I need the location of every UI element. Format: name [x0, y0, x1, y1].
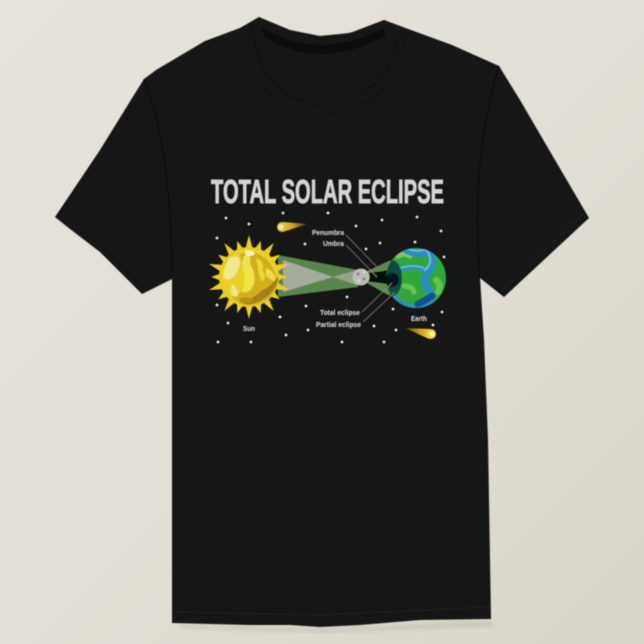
sun corona ring	[219, 247, 279, 307]
back neck tape	[262, 28, 385, 54]
label: Sun: Sun	[243, 326, 255, 333]
shirt body and sleeves	[55, 17, 589, 627]
collar band	[242, 24, 406, 115]
label lines	[346, 235, 395, 322]
label: Penumbra: Penumbra	[312, 230, 344, 237]
comet bottom	[405, 328, 436, 339]
moon	[352, 268, 370, 286]
penumbra wedge upper	[365, 260, 391, 274]
label: Partial eclipse: Partial eclipse	[316, 322, 361, 329]
earth light land	[398, 254, 410, 256]
earth ribbons blue	[404, 249, 432, 306]
hem shadow	[176, 622, 492, 632]
label: Earth: Earth	[411, 316, 427, 323]
label: Umbra: Umbra	[323, 241, 344, 248]
earth	[382, 248, 447, 309]
comet top	[277, 222, 307, 232]
label: Total eclipse: Total eclipse	[320, 310, 360, 317]
earth deep water	[418, 296, 432, 304]
penumbra wedge lower	[365, 280, 390, 296]
eclipse print	[208, 173, 447, 343]
earth shadow	[385, 260, 402, 296]
sun swirls	[224, 250, 279, 307]
sleeve seam left	[144, 79, 172, 279]
sun rays	[208, 235, 290, 319]
title: TOTAL SOLAR ECLIPSE	[211, 173, 444, 210]
right sleeve hem stitch	[503, 213, 584, 290]
sun	[208, 235, 290, 319]
sun disc	[222, 249, 278, 305]
bottom hem stitch	[176, 607, 490, 615]
inside back neck	[242, 17, 405, 104]
sleeve seam right	[477, 66, 499, 278]
t-shirt	[55, 17, 589, 627]
stars	[216, 212, 445, 343]
umbra	[365, 270, 394, 285]
light beam sun to moon	[278, 255, 358, 297]
earth ribbons light	[406, 248, 430, 270]
